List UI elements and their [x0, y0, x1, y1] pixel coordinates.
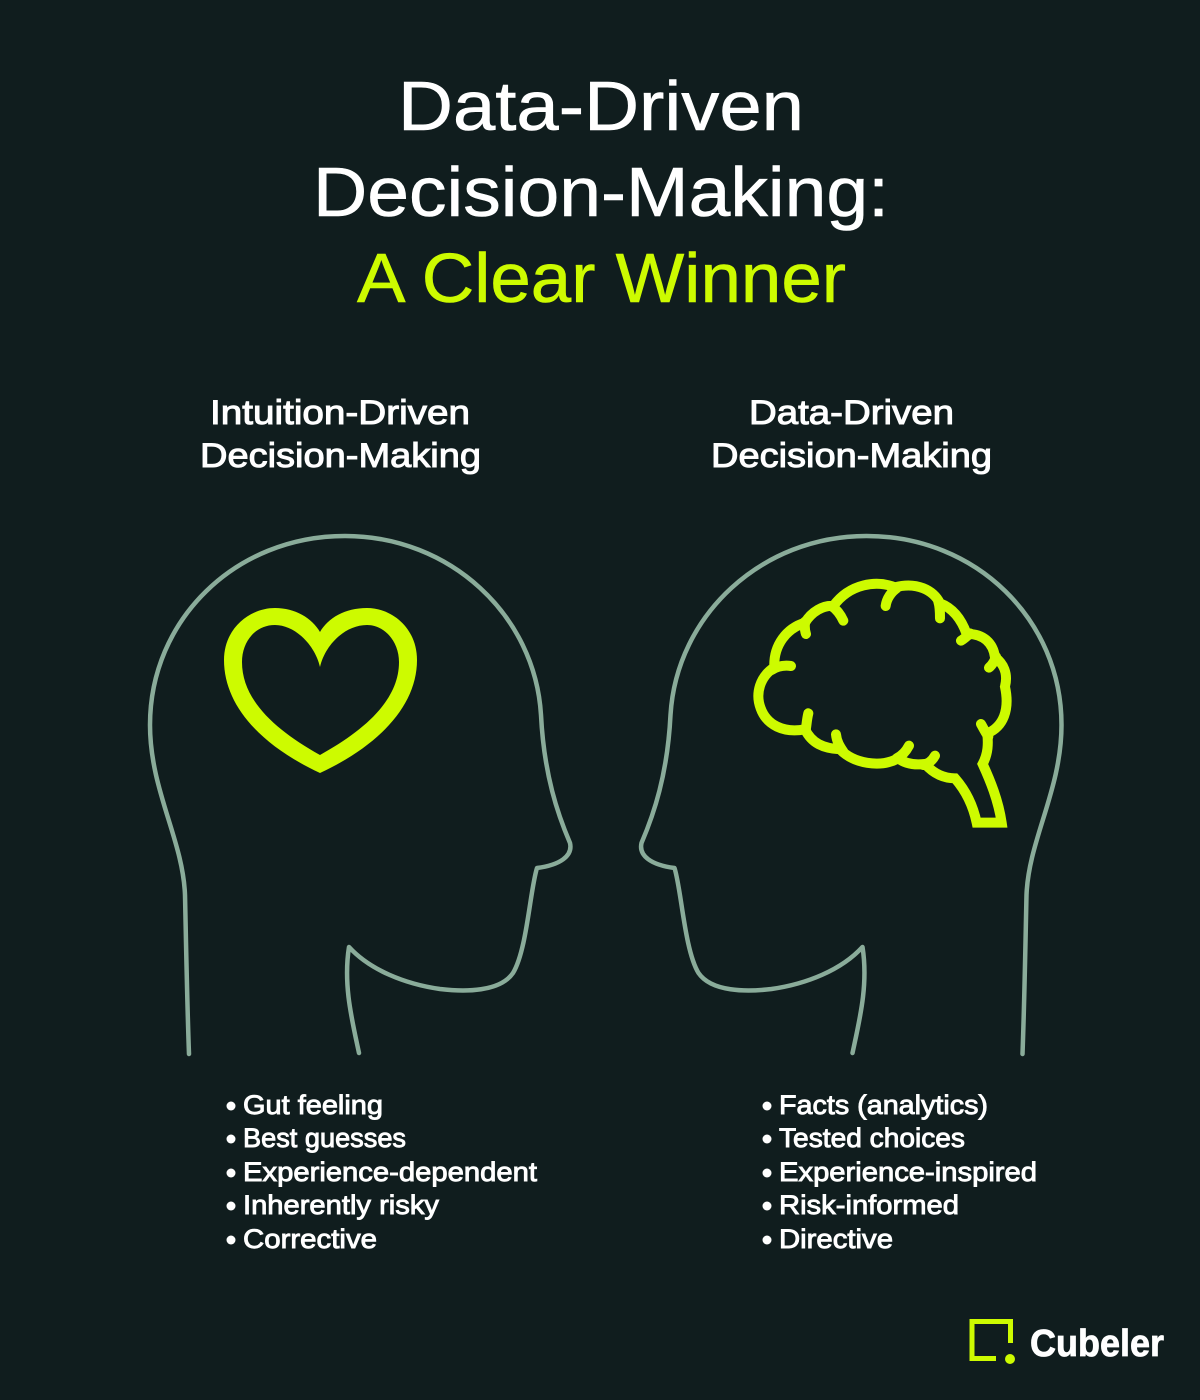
list: data traits: Risk-informed [779, 1190, 959, 1220]
list: data traits [762, 1090, 1037, 1254]
title [313, 67, 889, 317]
list: intuition traits: Experience-dependent [243, 1157, 538, 1187]
logo: Cubeler: Cubeler [1030, 1323, 1164, 1365]
list: intuition traits: Best guesses [243, 1123, 406, 1153]
icon: heart [224, 608, 417, 773]
list: intuition traits: Corrective [243, 1224, 377, 1254]
list: intuition traits: Inherently risky [243, 1190, 440, 1220]
heading: intuition-driven: Intuition-Driven [210, 394, 470, 432]
list: intuition traits [226, 1090, 538, 1254]
head outline: right [641, 536, 1062, 1054]
heading: intuition-driven: Decision-Making [200, 437, 481, 475]
logo: Cubeler [972, 1322, 1164, 1365]
list: data traits: Tested choices [779, 1123, 965, 1153]
title: Decision-Making: [313, 153, 889, 231]
title: Data-Driven [398, 67, 804, 145]
heading: intuition-driven [200, 394, 481, 475]
head outline: left [150, 536, 570, 1054]
list: intuition traits: Gut feeling [243, 1090, 383, 1120]
list: data traits: Experience-inspired [779, 1157, 1037, 1187]
list: data traits: Directive [779, 1224, 893, 1254]
title: A Clear Winner [357, 239, 846, 317]
icon: brain [758, 584, 1007, 823]
heading: data-driven: Data-Driven [749, 394, 954, 432]
heading: data-driven [711, 394, 992, 475]
list: data traits: Facts (analytics) [779, 1090, 988, 1120]
heading: data-driven: Decision-Making [711, 437, 992, 475]
